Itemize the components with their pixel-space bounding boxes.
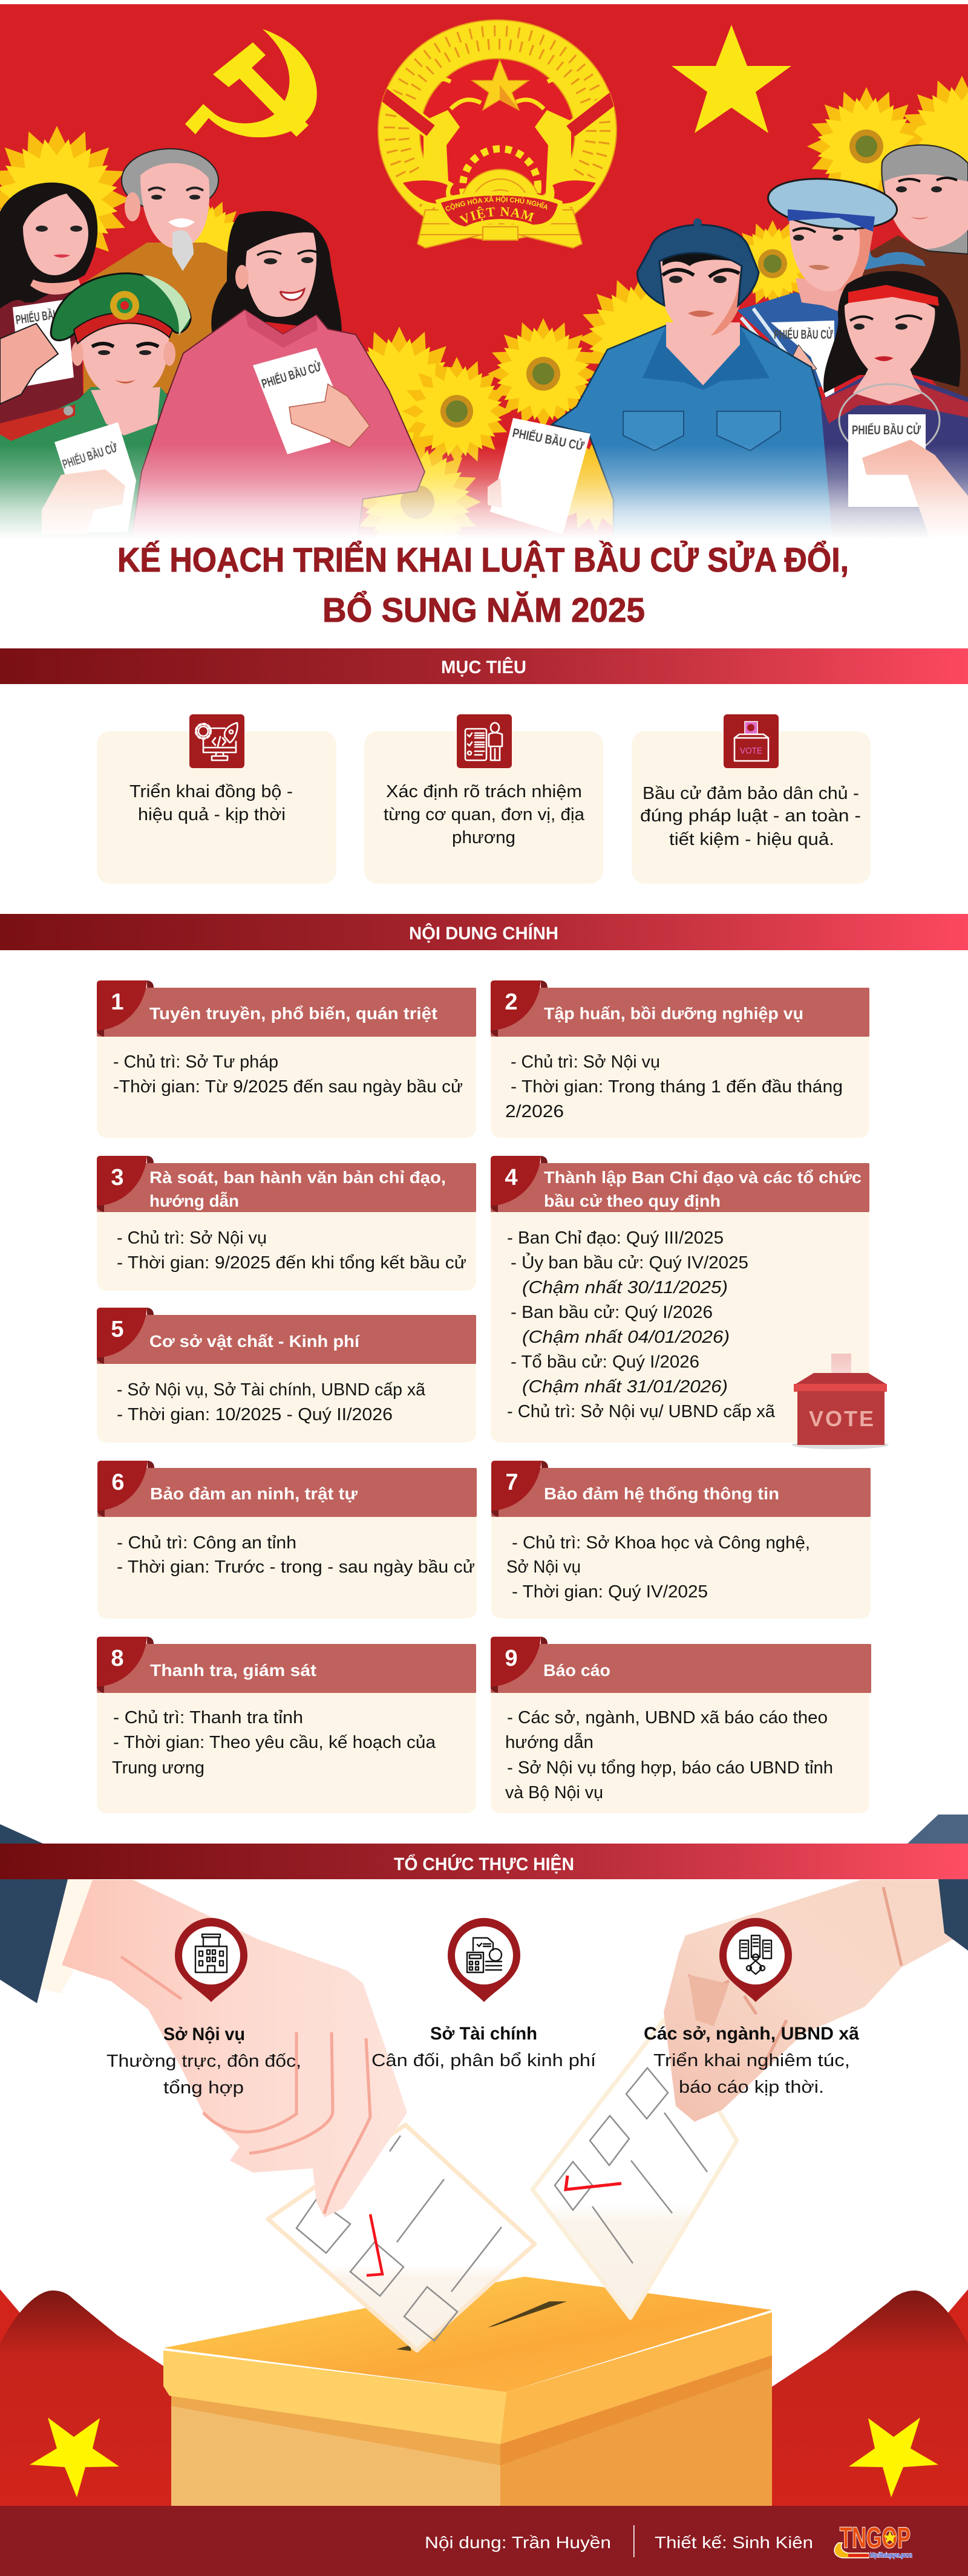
panel: card 8: 8 — [111, 1646, 124, 1671]
panel: card 6 — [97, 1461, 477, 1619]
icon: national emblem: CỘNG HÒA XÃ HỘI CHỦ NGHĨA — [445, 195, 547, 211]
panel: card 9: - Các sở, ngành, UBND xã báo cáo theo — [507, 1708, 828, 1727]
panel: card 2: 2/2026 — [505, 1102, 564, 1121]
illustration: ballots — [268, 2020, 737, 2350]
person: worker with helmet: PHIẾU BẦU CỬ — [511, 425, 586, 454]
text: tiết kiệm - hiệu quả. — [669, 830, 834, 849]
person: police officer: PHIẾU BẦU CỬ — [60, 440, 119, 472]
panel: card 2: 2 — [505, 990, 518, 1015]
text: sở tài chính — [371, 2024, 596, 2070]
text: các sở, ngành, ubnd xã — [644, 2024, 859, 2097]
bottom fade to white — [0, 445, 968, 575]
panel: card 3: Rà soát, ban hành văn bản chỉ đạo, — [149, 1168, 446, 1187]
panel: card 4: - Chủ trì: Sở Nội vụ/ UBND cấp xã — [507, 1402, 775, 1421]
panel: card 5: - Sở Nội vụ, Sở Tài chính, UBND cấp xã — [117, 1380, 425, 1400]
icon: yellow star — [672, 25, 791, 133]
panel: objective 1 — [97, 714, 336, 884]
text: sở nội vụ: Thường trực, đôn đốc, — [106, 2052, 301, 2071]
panel: card 4: (Chậm nhất 30/11/2025) — [522, 1278, 728, 1297]
panel: card 6: - Chủ trì: Công an tỉnh — [117, 1533, 296, 1553]
icon: hammer and sickle — [185, 29, 317, 137]
person: right elder — [857, 145, 968, 423]
logo: TNGOP: TNGOP — [840, 2522, 911, 2554]
panel: card 2 — [491, 980, 869, 1138]
panel: card 2: Tập huấn, bồi dưỡng nghiệp vụ — [544, 1004, 803, 1023]
person: girl with red headband — [820, 271, 968, 544]
person: woman left: PHIẾU BẦU — [15, 307, 60, 327]
panel: card 4: - Tổ bầu cử: Quý I/2026 — [511, 1352, 699, 1372]
title: KẾ HOẠCH TRIỂN KHAI LUẬT BẦU CỬ SỬA ĐỔI, — [117, 540, 849, 579]
person: police officer — [0, 273, 191, 544]
panel: card 8 — [97, 1637, 476, 1813]
person: sailor — [737, 173, 900, 397]
footer: Thiết kế: Sinh Kiên — [655, 2533, 813, 2552]
panel: card 3: - Chủ trì: Sở Nội vụ — [117, 1228, 267, 1248]
text: sở tài chính: Sở Tài chính — [430, 2024, 537, 2044]
text: sở nội vụ: tổng hợp — [163, 2078, 244, 2098]
logo: TNGOP: http://thainguyen.gov.vn — [870, 2552, 912, 2559]
illustration: hands — [62, 1880, 960, 2217]
title: BỔ SUNG NĂM 2025 — [322, 590, 645, 630]
text — [640, 784, 861, 849]
text: từng cơ quan, đơn vị, địa — [384, 805, 585, 824]
ballot box — [163, 2277, 772, 2506]
panel: card 9: - Sở Nội vụ tổng hợp, báo cáo UBND tỉnh — [507, 1758, 833, 1778]
panel: card 7 — [491, 1461, 871, 1619]
panel: card 9: 9 — [505, 1646, 518, 1671]
panel: card 9: Báo cáo — [543, 1661, 610, 1680]
logo: TNGOP — [834, 2522, 912, 2559]
text: sở tài chính: Cân đối, phân bổ kinh phí — [371, 2051, 596, 2070]
icon: vote box — [724, 714, 779, 768]
hero illustration — [0, 4, 968, 535]
panel: objective 2 — [364, 714, 603, 884]
flag: right — [768, 2289, 968, 2506]
panel: card 4: 4 — [505, 1165, 518, 1190]
text: Bầu cử đảm bảo dân chủ - — [643, 784, 859, 803]
person: worker with helmet — [488, 218, 842, 544]
text: phương — [452, 828, 515, 847]
panel: objective 3 — [632, 714, 871, 884]
panel: card 8: - Chủ trì: Thanh tra tỉnh — [113, 1708, 303, 1727]
text: các sở, ngành, ubnd xã: báo cáo kịp thời. — [679, 2078, 824, 2097]
panel: card 2: - Thời gian: Trong tháng 1 đến đầu tháng — [511, 1077, 843, 1097]
icon: vote box — [792, 1354, 889, 1449]
panel: card 9: và Bộ Nội vụ — [505, 1783, 603, 1802]
text: Xác định rõ trách nhiệm — [386, 782, 582, 801]
section banner: tổ chức thực hiện — [0, 1844, 968, 1879]
panel: card 3: 3 — [111, 1165, 124, 1190]
section banner: mục tiêu: MỤC TIÊU — [441, 657, 526, 677]
footer: Nội dung: Trần Huyền — [425, 2533, 611, 2552]
icon: calculator and coins — [467, 1938, 502, 1972]
panel: card 7: - Thời gian: Quý IV/2025 — [512, 1582, 708, 1602]
panel: card 1: Tuyên truyền, phổ biến, quán triệt — [149, 1004, 437, 1023]
panel: card 9: hướng dẫn — [505, 1733, 594, 1752]
icon: building — [195, 1934, 227, 1972]
flag: left — [0, 2289, 175, 2506]
panel: card 6: 6 — [111, 1470, 125, 1495]
panel: card 4: (Chậm nhất 04/01/2026) — [522, 1328, 730, 1347]
icon: sunflowers — [0, 76, 968, 566]
person: woman in pink ao dai: PHIẾU BẦU CỬ — [260, 359, 323, 391]
section banner: nội dung chính — [0, 914, 968, 950]
section banner: mục tiêu — [0, 648, 968, 684]
panel: card 3 — [97, 1156, 476, 1291]
ballot: right — [532, 2020, 737, 2318]
panel: card 1: - Chủ trì: Sở Tư pháp — [113, 1052, 278, 1072]
text — [129, 782, 293, 824]
panel: card 1: 1 — [111, 990, 124, 1015]
icon: star — [30, 2418, 119, 2497]
ballot: left — [268, 2125, 535, 2350]
person: girl with red headband: PHIẾU BẦU CỬ — [852, 423, 921, 437]
pin: các sở, ngành, ubnd xã — [719, 1918, 792, 2002]
icon: national emblem: VIỆT NAM — [459, 206, 535, 223]
panel: card 4: Thành lập Ban Chỉ đạo và các tổ chức — [544, 1168, 862, 1187]
illustration: suit sleeves — [0, 1815, 968, 2003]
panel: card 6: Bảo đảm an ninh, trật tự — [150, 1484, 358, 1503]
panel: card 7: Sở Nội vụ — [506, 1557, 581, 1577]
panel: card 5: 5 — [111, 1317, 124, 1342]
text: sở nội vụ — [106, 2024, 301, 2098]
icon: national emblem — [378, 19, 617, 249]
person: elder — [83, 149, 231, 393]
text: Triển khai đồng bộ - — [129, 782, 293, 801]
icon: monitor gear rocket — [189, 714, 244, 768]
text: các sở, ngành, ubnd xã: Triển khai nghiêm túc, — [653, 2051, 850, 2070]
panel: card 3: - Thời gian: 9/2025 đến khi tổng kết bầu cử — [117, 1253, 466, 1273]
text: sở nội vụ: Sở Nội vụ — [163, 2024, 245, 2044]
text: các sở, ngành, ubnd xã: Các sở, ngành, UBND xã — [644, 2024, 859, 2044]
person: woman left — [0, 183, 97, 423]
panel: card 6: - Thời gian: Trước - trong - sau ngày bầu cử — [117, 1557, 475, 1577]
panel: card 9 — [491, 1637, 871, 1813]
panel: card 7: 7 — [505, 1470, 518, 1495]
panel: card 5: - Thời gian: 10/2025 - Quý II/2026 — [117, 1405, 393, 1424]
panel: card 4: - Ban bầu cử: Quý I/2026 — [511, 1303, 713, 1322]
panel: card 8: Trung ương — [112, 1758, 204, 1778]
panel: card 8: Thanh tra, giám sát — [150, 1661, 316, 1680]
text: đúng pháp luật - an toàn - — [640, 806, 861, 826]
footer — [0, 2506, 968, 2576]
panel: card 4 — [491, 1156, 889, 1449]
section banner: tổ chức thực hiện: TỔ CHỨC THỰC HIỆN — [394, 1854, 574, 1874]
panel: card 8: - Thời gian: Theo yêu cầu, kế hoạch của — [113, 1733, 436, 1752]
person: sailor: PHIẾU BẦU CỬ — [774, 327, 833, 342]
panel: card 4: - Ủy ban bầu cử: Quý IV/2025 — [511, 1253, 748, 1273]
person: woman in pink ao dai — [131, 211, 425, 544]
panel: card 1: -Thời gian: Từ 9/2025 đến sau ngày bầu cử — [113, 1077, 463, 1097]
pin: sở tài chính — [448, 1918, 520, 2002]
pin: sở nội vụ — [175, 1918, 247, 2002]
icon: vote box: VOTE — [740, 746, 762, 756]
panel: card 7: Bảo đảm hệ thống thông tin — [544, 1484, 779, 1503]
panel: card 1 — [97, 980, 476, 1138]
hand: right — [664, 1880, 960, 2122]
hand: left — [62, 1880, 407, 2217]
icon: star — [849, 2418, 938, 2497]
panel: card 4: (Chậm nhất 31/01/2026) — [522, 1377, 728, 1397]
icon: person with checklist — [457, 714, 512, 768]
panel: card 5: Cơ sở vật chất - Kinh phí — [149, 1332, 360, 1351]
icon: offices and people — [740, 1935, 771, 1974]
panel: card 3: hướng dẫn — [149, 1192, 239, 1210]
panel: card 4: bầu cử theo quy định — [544, 1192, 721, 1210]
panel: card 7: - Chủ trì: Sở Khoa học và Công nghệ, — [512, 1533, 810, 1553]
panel: card 5 — [97, 1308, 476, 1443]
icon: vote box: VOTE — [809, 1406, 874, 1431]
title — [117, 540, 849, 630]
text — [384, 782, 585, 847]
panel: card 2: - Chủ trì: Sở Nội vụ — [511, 1052, 660, 1072]
panel: card 4: - Ban Chỉ đạo: Quý III/2025 — [507, 1228, 724, 1248]
section banner: nội dung chính: NỘI DUNG CHÍNH — [409, 923, 558, 944]
text: hiệu quả - kịp thời — [138, 805, 286, 824]
